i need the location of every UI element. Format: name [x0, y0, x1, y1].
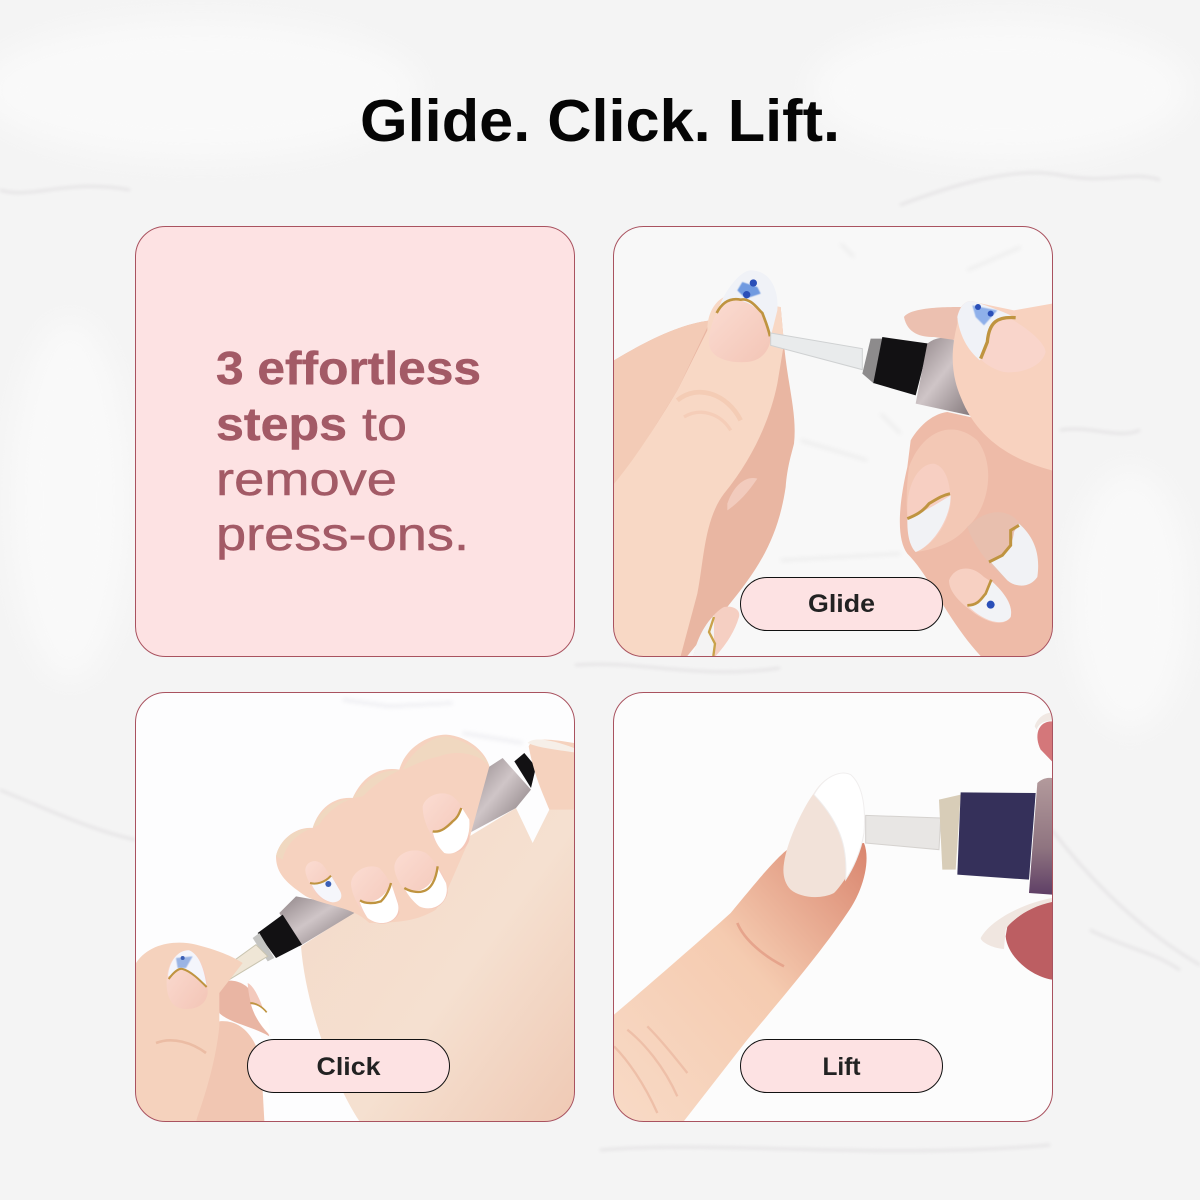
nail 1	[423, 793, 469, 854]
nail 3	[351, 866, 399, 924]
nail 2	[394, 850, 448, 909]
thumb nail	[716, 279, 778, 362]
fingers at right	[981, 712, 1052, 980]
middle finger nail	[907, 464, 951, 552]
remover pen	[866, 778, 1052, 895]
french nail	[783, 773, 865, 897]
label: click	[248, 1040, 450, 1092]
nail 4	[305, 861, 341, 902]
intro text: 3 effortless	[216, 342, 481, 394]
palm	[301, 808, 574, 1121]
label: glide: Glide	[808, 590, 875, 618]
lower left hand	[136, 943, 271, 1121]
intro text: remove	[216, 453, 397, 505]
pen body	[229, 753, 535, 980]
label: click: Click	[316, 1053, 381, 1081]
right thumb nail	[957, 301, 1046, 372]
left hand	[614, 270, 795, 656]
intro text: to	[362, 398, 407, 450]
label: lift	[740, 1040, 942, 1092]
right hand	[900, 301, 1052, 656]
right thumb	[528, 739, 574, 810]
remover pen	[771, 333, 977, 417]
panel: glide photo	[614, 226, 1052, 656]
intro text: steps	[216, 398, 347, 450]
panel: intro	[136, 226, 574, 656]
intro text: press-ons.	[216, 508, 469, 560]
pinky nail	[949, 569, 1011, 623]
title: Glide. Click. Lift.	[360, 88, 840, 154]
fingers	[276, 735, 489, 923]
ring finger nail	[988, 524, 1038, 586]
label: glide	[740, 578, 942, 630]
label: lift: Lift	[822, 1053, 861, 1081]
finger	[614, 843, 867, 1121]
bottom-left nail	[693, 607, 739, 656]
panel: click photo	[136, 692, 574, 1122]
panel: lift photo	[614, 692, 1052, 1122]
